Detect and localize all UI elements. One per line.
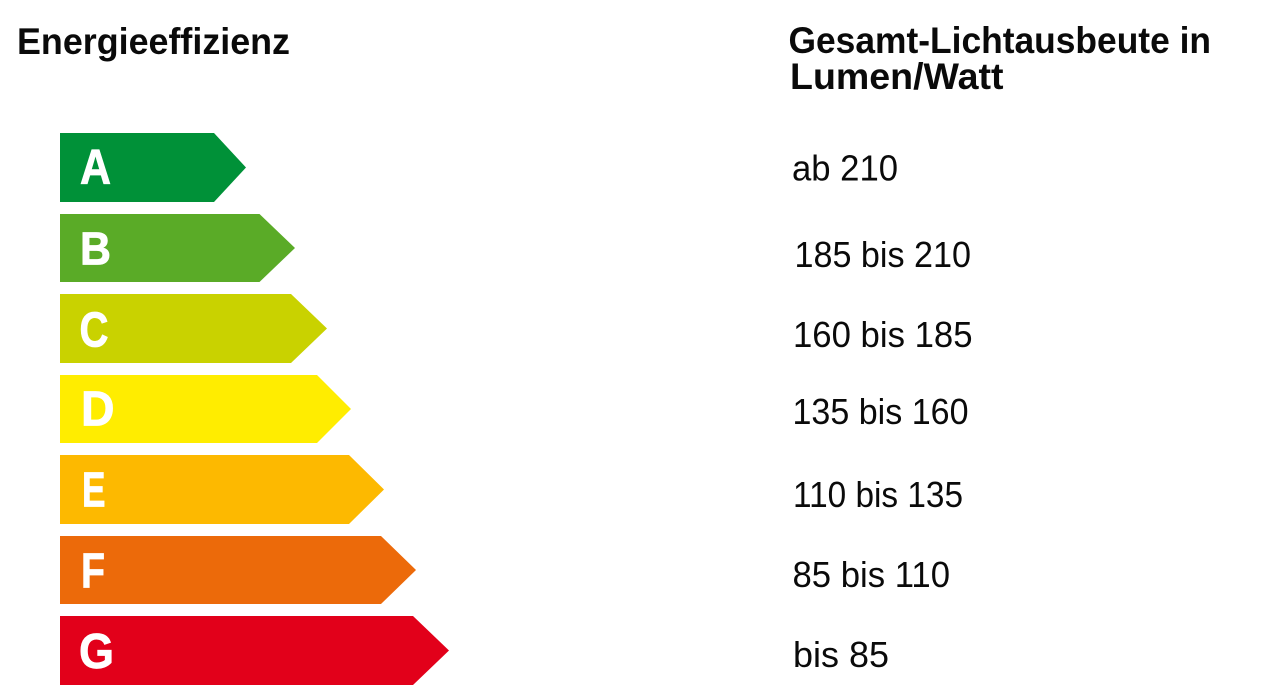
arrow: class F: F <box>81 544 105 598</box>
arrow: class F <box>60 536 416 604</box>
value: class F: 85 bis 110 <box>792 554 950 595</box>
arrow: class B <box>60 214 295 282</box>
value: class D: 135 bis 160 <box>792 391 968 432</box>
arrow: class E: E <box>82 464 106 518</box>
arrow: class G: G <box>79 625 114 679</box>
arrow: class A <box>60 133 246 202</box>
arrow: class G <box>60 616 449 685</box>
heading: Gesamt-Lichtausbeute in Lumen/Watt: Gesamt-Lichtausbeute in <box>788 20 1211 61</box>
heading: Gesamt-Lichtausbeute in Lumen/Watt <box>788 20 1211 97</box>
arrow: class D <box>60 375 351 443</box>
value: class C: 160 bis 185 <box>793 314 972 355</box>
arrow: class D: D <box>81 382 114 436</box>
arrow: class B: B <box>80 222 111 274</box>
arrow: class A: A <box>80 140 111 194</box>
value: class G: bis 85 <box>793 634 889 675</box>
value: class A: ab 210 <box>792 148 898 188</box>
arrow: class C <box>60 294 327 363</box>
heading: Energieeffizienz: Energieeffizienz <box>17 21 290 62</box>
arrow: class E <box>60 455 384 524</box>
heading: Gesamt-Lichtausbeute in Lumen/Watt: Lumen/Watt <box>790 56 1004 97</box>
arrow: class C: C <box>80 304 108 358</box>
value: class E: 110 bis 135 <box>793 474 963 515</box>
value: class B: 185 bis 210 <box>794 234 971 275</box>
